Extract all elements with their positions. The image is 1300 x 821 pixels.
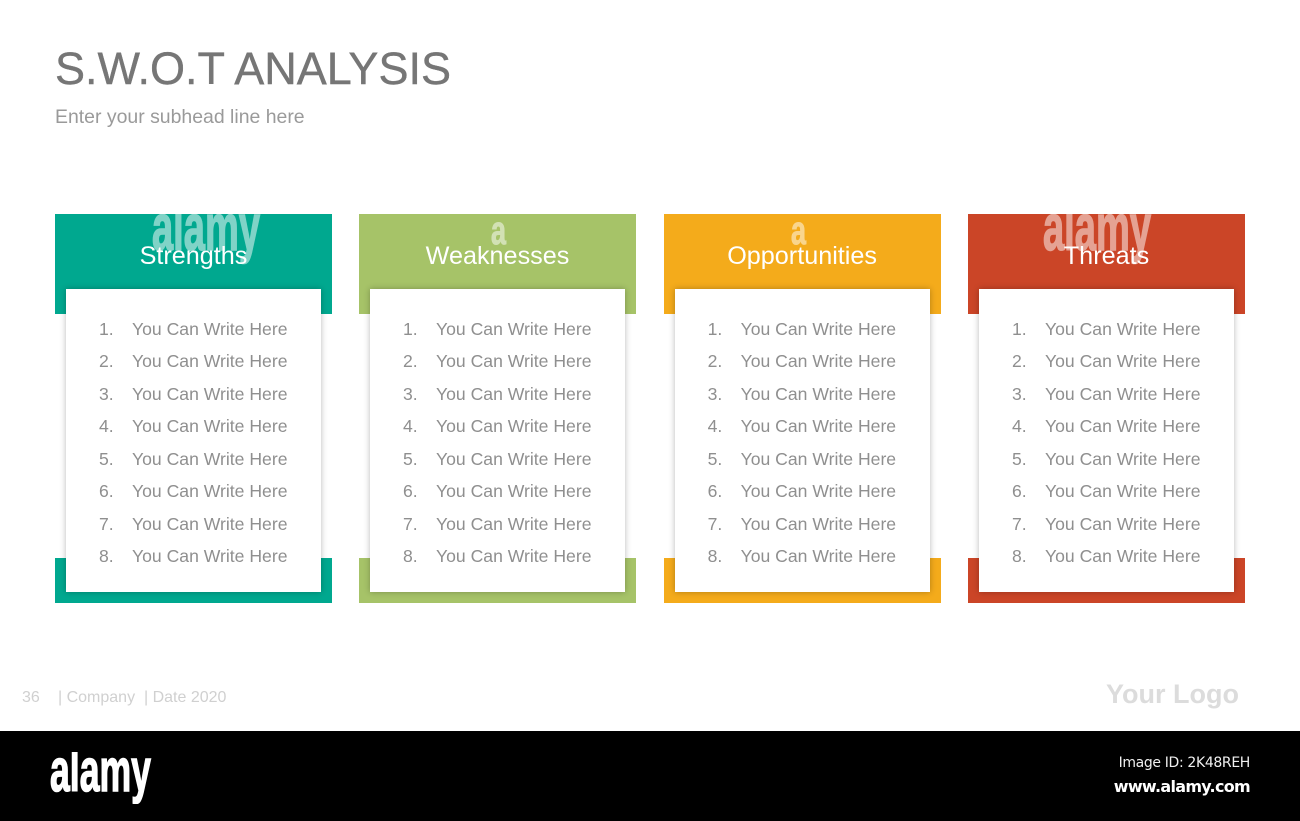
- top colour band: [55, 214, 332, 314]
- list card: 7.: [708, 514, 722, 534]
- list card: 8.: [1012, 546, 1027, 566]
- list card: You Can Write Here: [1045, 416, 1200, 436]
- list card: [675, 289, 930, 592]
- list card: You Can Write Here: [132, 449, 288, 469]
- list card: You Can Write Here: [436, 416, 592, 436]
- title: S.W.O.T ANALYSIS: [55, 43, 451, 94]
- website: www.alamy.com: [1114, 777, 1250, 796]
- bottom colour band: [55, 558, 332, 603]
- list card: 3.: [708, 384, 722, 404]
- list card: You Can Write Here: [132, 481, 288, 501]
- list card: 4.: [1012, 416, 1027, 436]
- list card: 3.: [99, 384, 114, 404]
- list card: You Can Write Here: [436, 514, 592, 534]
- list card: You Can Write Here: [1045, 546, 1200, 566]
- list card: 8.: [403, 546, 418, 566]
- list card: 7.: [403, 514, 418, 534]
- list card: You Can Write Here: [436, 449, 592, 469]
- list card: 6.: [99, 481, 114, 501]
- footer: page number: 36: [22, 689, 40, 706]
- list card: You Can Write Here: [132, 546, 288, 566]
- list card: [66, 289, 321, 592]
- bottom colour band: [359, 558, 636, 603]
- list card: You Can Write Here: [741, 384, 896, 404]
- list card: You Can Write Here: [436, 546, 592, 566]
- list card: You Can Write Here: [741, 546, 896, 566]
- list card: You Can Write Here: [741, 514, 896, 534]
- list card: You Can Write Here: [1045, 384, 1200, 404]
- list card: You Can Write Here: [1045, 351, 1200, 371]
- list card: You Can Write Here: [132, 514, 288, 534]
- list card: 6.: [1012, 481, 1027, 501]
- list card: 7.: [1012, 514, 1027, 534]
- panel: opportunities: [664, 214, 941, 603]
- list card: You Can Write Here: [436, 384, 592, 404]
- list card: You Can Write Here: [741, 449, 896, 469]
- list card: You Can Write Here: [1045, 319, 1200, 339]
- list card: 4.: [99, 416, 114, 436]
- list card: You Can Write Here: [741, 416, 896, 436]
- list card: 1.: [99, 319, 114, 339]
- panel: threats: [968, 214, 1245, 603]
- image id: Image ID: 2K48REH: [1119, 755, 1250, 771]
- list card: 8.: [708, 546, 722, 566]
- list card: 5.: [99, 449, 114, 469]
- list card: 2.: [1012, 351, 1027, 371]
- list card: 1.: [708, 319, 722, 339]
- list card: 6.: [708, 481, 722, 501]
- panel: weaknesses: [359, 214, 636, 603]
- subhead: Enter your subhead line here: [55, 106, 305, 128]
- list card: You Can Write Here: [436, 351, 592, 371]
- list card: You Can Write Here: [1045, 449, 1200, 469]
- top colour band: [664, 214, 941, 314]
- list card: 6.: [403, 481, 418, 501]
- heading: weaknesses: Weaknesses: [426, 242, 569, 270]
- top colour band: [359, 214, 636, 314]
- list card: 5.: [1012, 449, 1027, 469]
- heading: opportunities: Opportunities: [727, 242, 877, 270]
- list card: 5.: [708, 449, 722, 469]
- list card: 2.: [99, 351, 114, 371]
- heading: strengths: Strengths: [140, 242, 247, 270]
- list card: [370, 289, 625, 592]
- list card: You Can Write Here: [1045, 514, 1200, 534]
- list card: 1.: [1012, 319, 1027, 339]
- logo placeholder: Your Logo: [1106, 679, 1239, 709]
- list card: 4.: [403, 416, 418, 436]
- list card: [979, 289, 1234, 592]
- bottom colour band: [664, 558, 941, 603]
- bottom colour band: [968, 558, 1245, 603]
- list card: 5.: [403, 449, 418, 469]
- panel: strengths: [55, 214, 332, 603]
- list card: You Can Write Here: [741, 351, 896, 371]
- black footer bar: [0, 731, 1300, 821]
- list card: You Can Write Here: [132, 319, 288, 339]
- heading: threats: Threats: [1064, 242, 1149, 270]
- list card: You Can Write Here: [1045, 481, 1200, 501]
- list card: You Can Write Here: [132, 416, 288, 436]
- list card: You Can Write Here: [132, 384, 288, 404]
- list card: You Can Write Here: [741, 319, 896, 339]
- list card: You Can Write Here: [436, 481, 592, 501]
- list card: 2.: [403, 351, 418, 371]
- list card: 3.: [1012, 384, 1027, 404]
- footer: company and date: | Company | Date 2020: [58, 689, 226, 706]
- list card: 4.: [708, 416, 722, 436]
- top colour band: [968, 214, 1245, 314]
- list card: 2.: [708, 351, 722, 371]
- list card: 3.: [403, 384, 418, 404]
- list card: You Can Write Here: [741, 481, 896, 501]
- list card: 7.: [99, 514, 114, 534]
- list card: You Can Write Here: [132, 351, 288, 371]
- list card: 1.: [403, 319, 418, 339]
- list card: 8.: [99, 546, 114, 566]
- list card: You Can Write Here: [436, 319, 592, 339]
